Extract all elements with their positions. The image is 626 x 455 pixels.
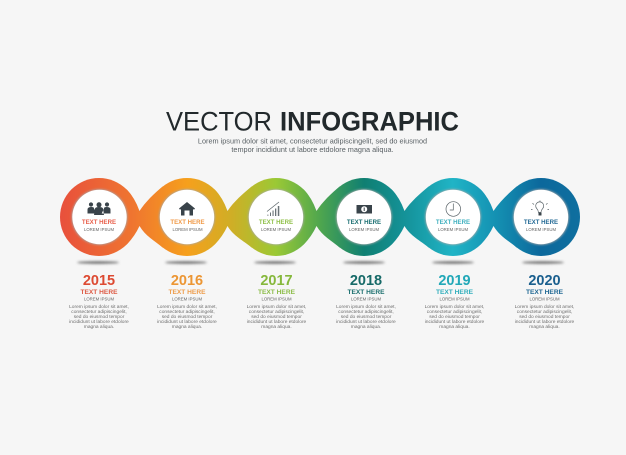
panel: 2019 details: TEXT HERE bbox=[436, 289, 474, 296]
panel: 2017 details: Lorem ipsum dolor sit amet, bbox=[247, 304, 306, 310]
subtitle: Lorem ipsum dolor sit amet, consectetur adipiscingelit, sed do eiusmod bbox=[198, 136, 427, 146]
panel: 2015 details: consectetur adipiscingelit, bbox=[71, 309, 127, 315]
panel: 2016 details: magna aliqua. bbox=[172, 324, 202, 330]
panel: 2015 details: LOREM IPSUM bbox=[84, 296, 114, 302]
icon: light bulb bbox=[531, 200, 549, 216]
panel: 2018 details: incididunt ut labore etdolore bbox=[336, 319, 396, 325]
panel: 2019 details: magna aliqua. bbox=[439, 324, 470, 330]
panel: 2016 details bbox=[157, 273, 217, 330]
panel: 2015 details bbox=[69, 273, 129, 330]
panel: 2017 details: LOREM IPSUM bbox=[261, 296, 292, 302]
panel: 2018 details: 2018 bbox=[350, 273, 382, 289]
panel: 2016 details: consectetur adipiscingelit, bbox=[159, 309, 215, 315]
label: text here: TEXT HERE bbox=[524, 219, 558, 226]
label: lorem ipsum: LOREM IPSUM bbox=[526, 227, 556, 232]
icon: people bbox=[88, 202, 110, 215]
label: text here: TEXT HERE bbox=[436, 219, 470, 226]
title: VECTOR bbox=[166, 106, 272, 136]
panel: 2020 details: TEXT HERE bbox=[526, 289, 564, 296]
label: lorem ipsum: LOREM IPSUM bbox=[438, 227, 468, 232]
panel: 2015 circle bbox=[72, 189, 127, 245]
panel: 2018 details: TEXT HERE bbox=[347, 289, 385, 296]
panel: 2017 circle bbox=[248, 189, 304, 245]
panel: 2020 details: LOREM IPSUM bbox=[529, 296, 560, 302]
panel: 2020 details: consectetur adipiscingelit, bbox=[517, 309, 572, 315]
panel: 2018 details: LOREM IPSUM bbox=[351, 296, 381, 302]
panel: 2019 circle bbox=[425, 189, 481, 245]
label: lorem ipsum: LOREM IPSUM bbox=[261, 227, 291, 232]
panel: 2020 details: sed do eiusmod tempor bbox=[519, 314, 570, 320]
label: lorem ipsum: LOREM IPSUM bbox=[172, 227, 203, 232]
subtitle: tempor incididunt ut labore etdolore magna aliqua. bbox=[231, 145, 394, 154]
panel: 2020 details: magna aliqua. bbox=[529, 324, 560, 330]
panel: 2018 circle bbox=[336, 189, 392, 245]
panel: 2017 details: consectetur adipiscingelit, bbox=[249, 309, 304, 315]
panel: 2019 details: consectetur adipiscingelit, bbox=[427, 309, 482, 315]
label: text here: TEXT HERE bbox=[347, 219, 381, 226]
panel: 2015 details: sed do eiusmod tempor bbox=[74, 314, 125, 320]
panel: 2019 details: Lorem ipsum dolor sit amet, bbox=[425, 304, 484, 310]
icon: clock bbox=[446, 202, 461, 216]
panel: 2019 details: sed do eiusmod tempor bbox=[429, 314, 480, 320]
icon: banknote bbox=[356, 205, 372, 214]
panel: 2018 details: sed do eiusmod tempor bbox=[341, 314, 392, 320]
panel: 2016 details: sed do eiusmod tempor bbox=[162, 314, 213, 320]
label: text here: TEXT HERE bbox=[82, 219, 116, 226]
panel: 2019 details bbox=[425, 273, 485, 330]
panel: 2019 details: incididunt ut labore etdolore bbox=[425, 319, 485, 325]
panel: 2020 details: 2020 bbox=[528, 273, 561, 289]
panel: 2019 details: 2019 bbox=[438, 273, 471, 289]
panel: 2018 details: consectetur adipiscingelit, bbox=[338, 309, 394, 315]
label: lorem ipsum: LOREM IPSUM bbox=[349, 227, 379, 232]
panel: 2016 details: 2016 bbox=[171, 273, 203, 289]
panel: 2016 details: LOREM IPSUM bbox=[172, 296, 202, 302]
panel: 2018 details: Lorem ipsum dolor sit amet, bbox=[336, 304, 396, 310]
panel: 2020 details: Lorem ipsum dolor sit amet, bbox=[515, 304, 574, 310]
panel: 2017 details: incididunt ut labore etdolore bbox=[247, 319, 307, 325]
panel: 2015 details: TEXT HERE bbox=[80, 289, 118, 296]
title: INFOGRAPHIC bbox=[280, 106, 459, 136]
linked ring chain bbox=[60, 178, 580, 256]
panel: 2016 details: Lorem ipsum dolor sit amet, bbox=[157, 304, 217, 310]
panel: 2018 details: magna aliqua. bbox=[351, 324, 381, 330]
label: lorem ipsum: LOREM IPSUM bbox=[84, 227, 114, 232]
label: text here: TEXT HERE bbox=[259, 219, 293, 226]
panel: 2020 circle bbox=[513, 189, 569, 245]
panel: 2020 details bbox=[515, 273, 575, 330]
panel: 2017 details: sed do eiusmod tempor bbox=[251, 314, 302, 320]
panel: 2016 circle bbox=[159, 189, 215, 245]
label: text here: TEXT HERE bbox=[170, 219, 205, 226]
icon: house bbox=[179, 202, 195, 216]
panel: 2015 details: incididunt ut labore etdolore bbox=[69, 319, 129, 325]
panel: 2019 details: LOREM IPSUM bbox=[439, 296, 470, 302]
panel: 2017 details: 2017 bbox=[260, 273, 293, 289]
panel: 2017 details: magna aliqua. bbox=[261, 324, 292, 330]
panel: 2015 details: magna aliqua. bbox=[84, 324, 114, 330]
panel: 2016 details: incididunt ut labore etdolore bbox=[157, 319, 217, 325]
panel: 2017 details bbox=[247, 273, 307, 330]
panel: 2018 details bbox=[336, 273, 396, 330]
icon: growth chart bbox=[267, 202, 279, 216]
panel: 2015 details: 2015 bbox=[83, 273, 115, 289]
panel: 2016 details: TEXT HERE bbox=[168, 289, 206, 296]
panel: 2017 details: TEXT HERE bbox=[258, 289, 296, 296]
ring shadows bbox=[77, 261, 564, 264]
panel: 2015 details: Lorem ipsum dolor sit amet, bbox=[69, 304, 129, 310]
panel: 2020 details: incididunt ut labore etdolore bbox=[515, 319, 575, 325]
